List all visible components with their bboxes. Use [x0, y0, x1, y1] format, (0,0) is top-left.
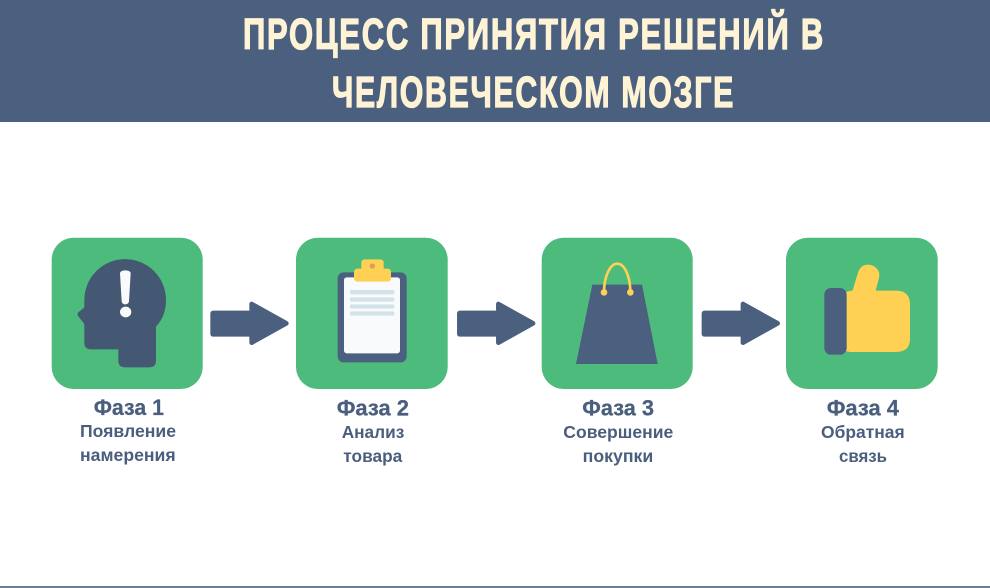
header band	[0, 0, 990, 122]
phase 2 description	[342, 422, 405, 466]
phase 2 description: Анализ	[342, 422, 405, 442]
phase 3 description	[563, 422, 674, 466]
title: ЧЕЛОВЕЧЕСКОМ МОЗГЕ	[332, 68, 735, 117]
panel: phase 1	[52, 238, 203, 465]
bottom rule	[0, 586, 990, 588]
phase 1 description: Появление	[80, 421, 176, 441]
panel: phase 2	[296, 238, 448, 466]
phase 4 label: Фаза 4	[827, 396, 899, 421]
phase 4 description: Обратная	[821, 422, 905, 442]
phase 3 description: покупки	[583, 446, 653, 466]
phase 1 description: намерения	[80, 445, 176, 465]
phase 4 description: связь	[839, 446, 887, 466]
icon: thumbs up	[824, 265, 910, 355]
icon: head with exclamation mark	[77, 259, 166, 367]
arrow 3 to 4	[702, 304, 778, 343]
phase 2 description: товара	[343, 446, 403, 466]
arrow 2 to 3	[457, 304, 533, 343]
icon: shopping bag	[576, 264, 658, 364]
arrow 1 to 2	[210, 304, 286, 343]
phase 4 description	[821, 422, 905, 466]
phase 1 description	[80, 421, 176, 465]
phase 2 green tile	[296, 238, 448, 389]
phase 3 green tile	[542, 238, 693, 389]
panel: phase 4	[786, 238, 938, 466]
phase 1 green tile	[52, 238, 203, 389]
phase 1 label: Фаза 1	[94, 395, 164, 420]
phase 3 description: Совершение	[563, 422, 674, 442]
panel: phase 3	[542, 238, 693, 466]
phase 2 label: Фаза 2	[337, 396, 409, 421]
title	[243, 8, 825, 117]
icon: clipboard	[338, 259, 407, 362]
phase 4 green tile	[786, 238, 938, 389]
phase 3 label: Фаза 3	[582, 396, 654, 421]
